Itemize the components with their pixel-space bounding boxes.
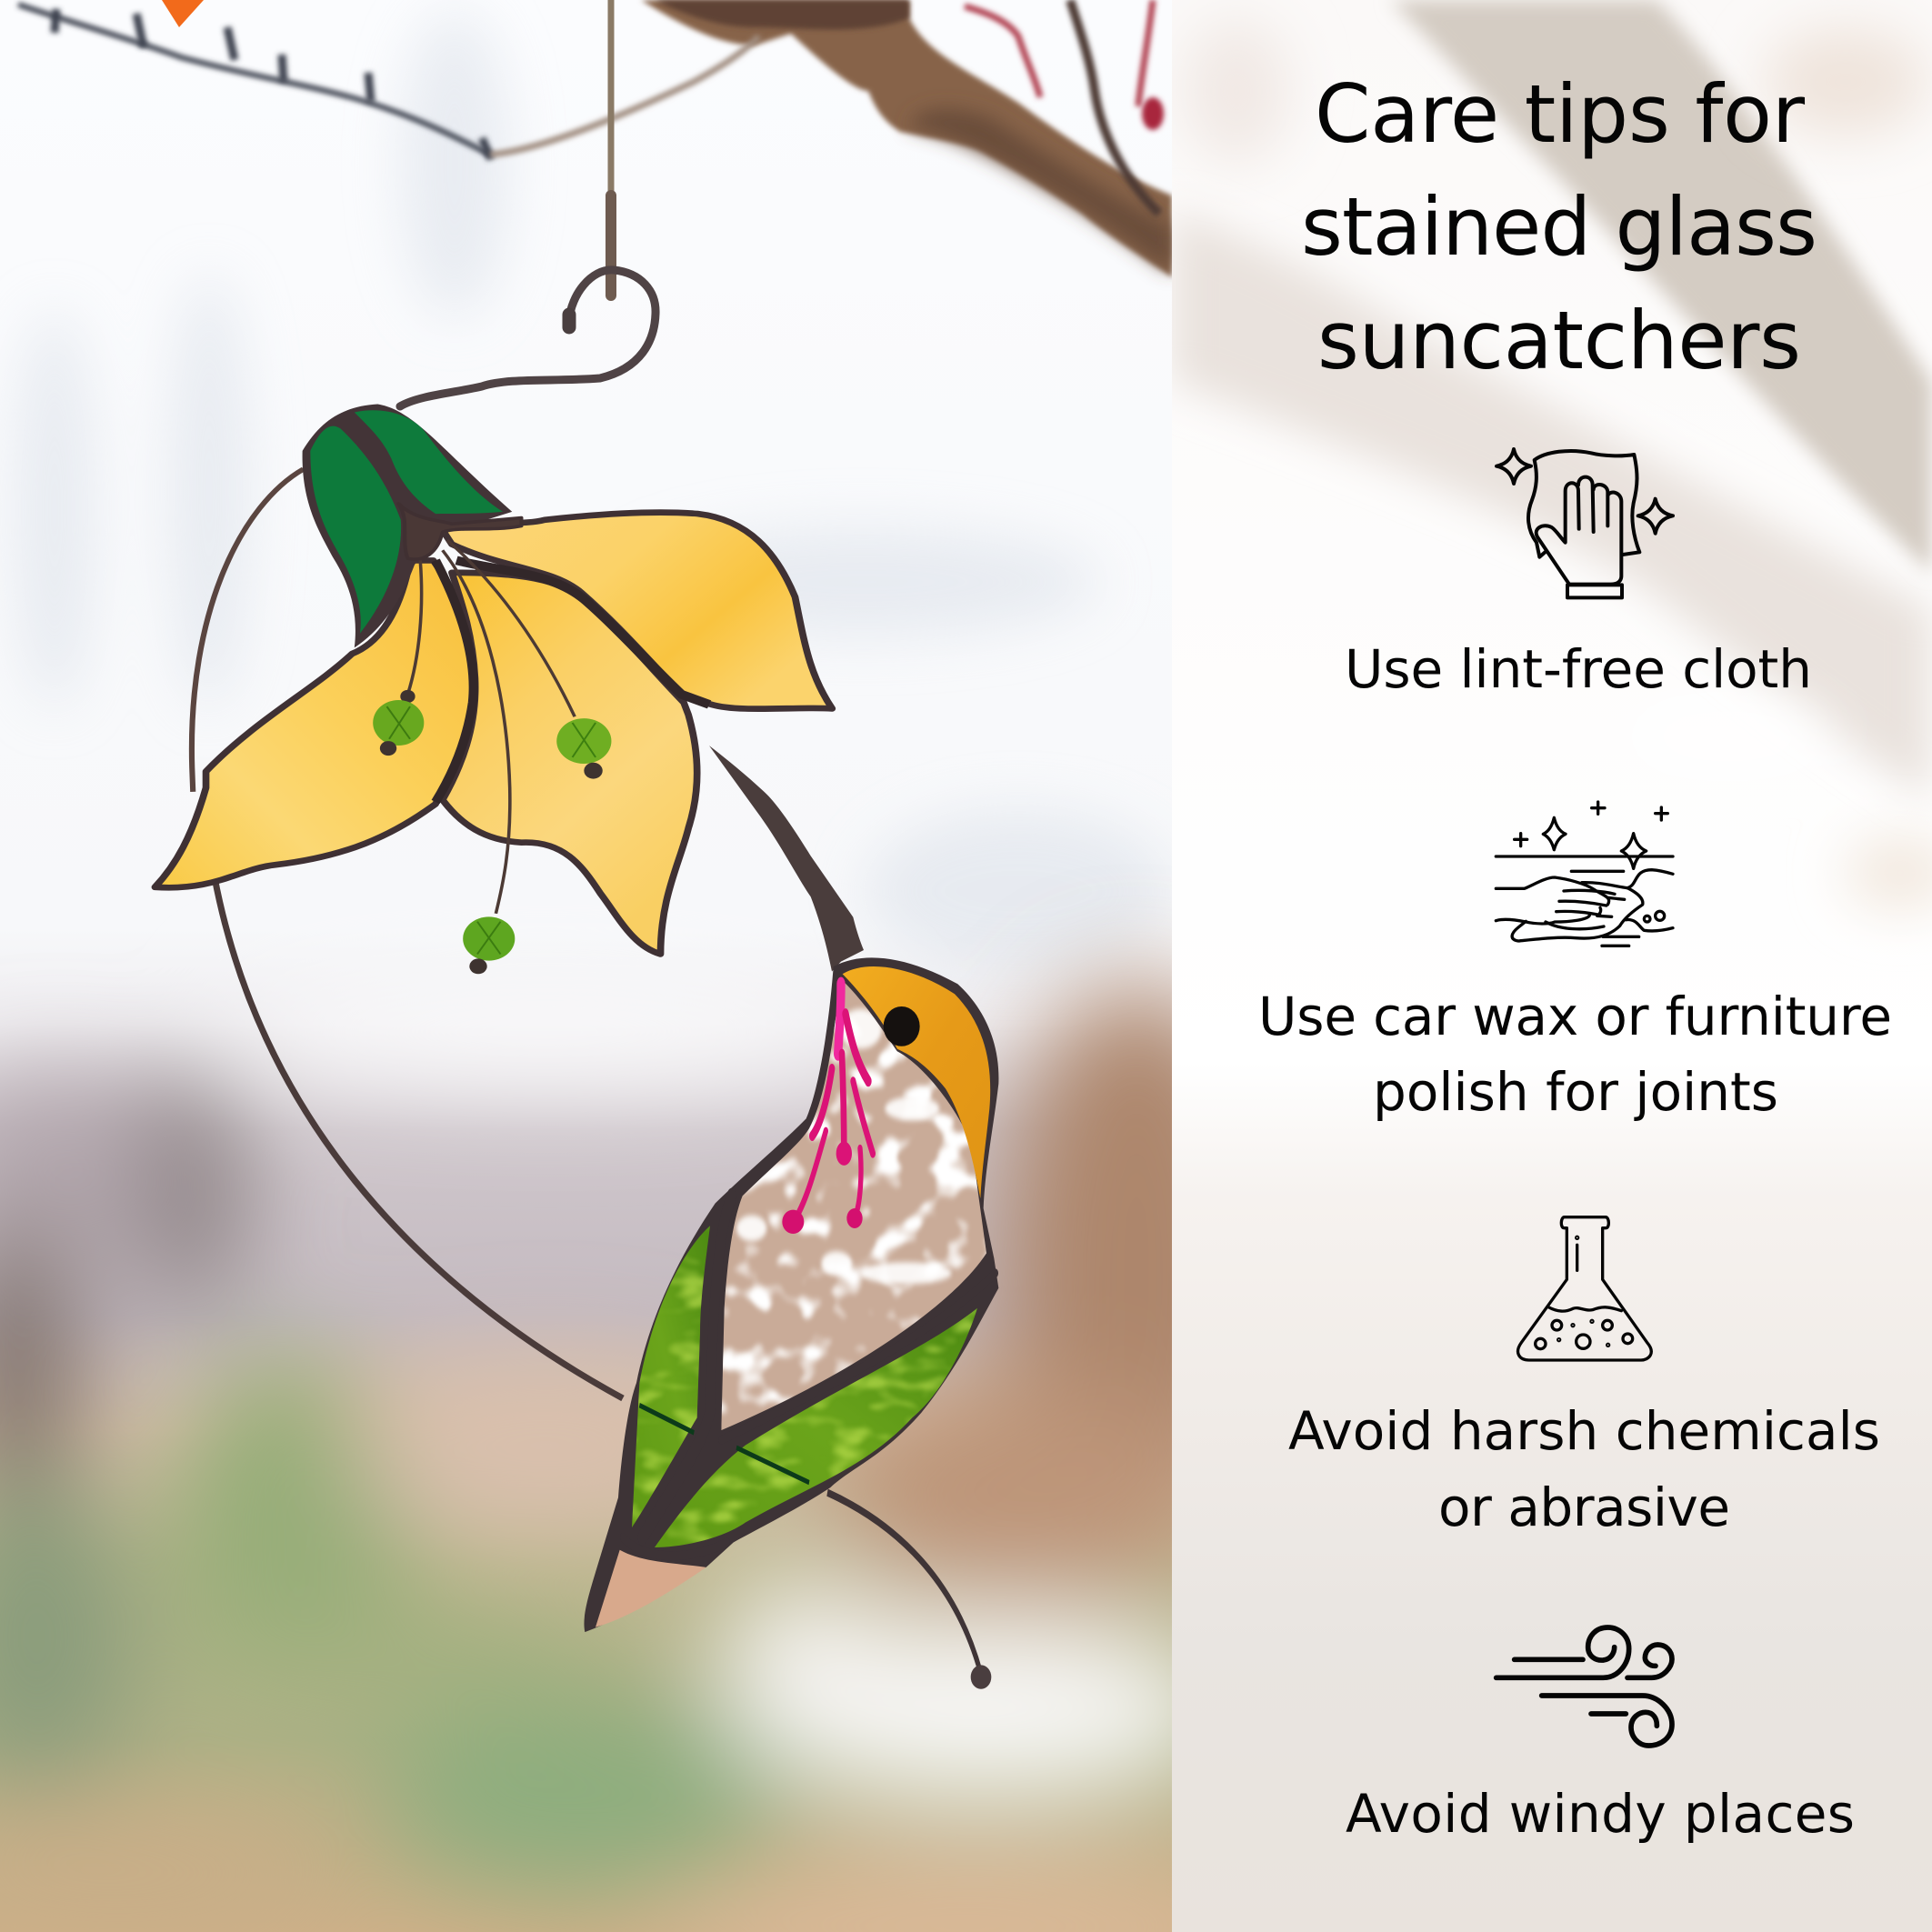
icon: wind gusts (1497, 1627, 1672, 1746)
background: red bud (1142, 97, 1164, 130)
background: faded tree trunk (1390, 0, 1932, 574)
bird: clear textured glass belly (716, 959, 1003, 1457)
bird: lead lines between pieces (623, 1196, 996, 1556)
bird: lead body outline (584, 957, 998, 1632)
bird: dark glass cracks (639, 1406, 809, 1483)
text: use lint-free cloth: Use lint-free cloth (1345, 638, 1812, 700)
background: faded warm patches (1182, 18, 1932, 909)
icon: polishing hand with sparkles (1496, 802, 1673, 946)
bird: beak (709, 746, 864, 972)
flower: calyx solder joint (398, 504, 521, 559)
bird: tail glass (596, 1550, 706, 1627)
flower: wire arc (192, 469, 304, 792)
flower: left green sepal (310, 426, 401, 634)
icon: hand wiping with cloth (1497, 449, 1673, 597)
stained glass hummingbird (584, 746, 1003, 1689)
icon: chemical flask (1518, 1217, 1651, 1360)
stained glass flower (155, 405, 832, 974)
text: use car wax or furniture polish for joints (1258, 986, 1892, 1123)
background: faded lower branch (1172, 209, 1932, 800)
heading: Care tips for (1315, 67, 1806, 161)
flower: petal divider leads (456, 560, 709, 705)
text: avoid harsh chemicals or abrasive (1288, 1400, 1880, 1538)
flower: stamen left with bead (373, 560, 424, 756)
bird: perch wire with end ball (827, 1493, 991, 1689)
background: pale cloud shadows (14, 9, 1173, 973)
heading: stained glass (1301, 180, 1817, 274)
suspension wire lower arc (215, 877, 623, 1398)
bird: magenta throat paint (782, 984, 873, 1234)
heading: suncatchers (1317, 294, 1801, 387)
text: use car wax or furniture polish for joints: polish for joints (1373, 1061, 1778, 1123)
text: use car wax or furniture polish for joints: Use car wax or furniture (1258, 986, 1892, 1047)
heading (1301, 67, 1817, 387)
background: orange leaf tip (162, 0, 204, 27)
panel: translucent right column background (1172, 0, 1932, 1932)
flower: stamen middle with bead (443, 550, 515, 974)
bird: eye (884, 1006, 920, 1046)
background: twig buds (55, 9, 491, 159)
flower: right green sepal (355, 410, 503, 514)
text: avoid windy places: Avoid windy places (1346, 1783, 1855, 1845)
background: thin dark twig (18, 5, 490, 155)
text: avoid harsh chemicals or abrasive: Avoid harsh chemicals (1288, 1400, 1880, 1462)
hanging hook and wire (400, 0, 656, 406)
background: distant brown and green blur (0, 982, 1273, 1932)
panel: blurred photo background (0, 0, 1273, 1932)
background: dark twig at branch end (1070, 0, 1159, 214)
bird: left wing green glass (632, 1226, 710, 1527)
background: pale twig section (490, 36, 759, 155)
background: darker branch core (909, 109, 1172, 273)
text: avoid harsh chemicals or abrasive: or abrasive (1438, 1477, 1730, 1538)
flower: sepal lead backing (303, 405, 512, 647)
bird: green glass light streaks (625, 1218, 988, 1557)
flower: stamen right with bead (447, 540, 611, 779)
flower: middle petal (443, 573, 697, 954)
flower: right petal (443, 513, 832, 709)
bird: amber head (843, 966, 990, 1198)
background: tree branch (641, 0, 1172, 277)
bird: lower wing green glass (655, 1308, 977, 1547)
flower: left petal (155, 560, 475, 887)
background: dark top of branch (655, 0, 909, 29)
background: red twigs (965, 0, 1153, 106)
